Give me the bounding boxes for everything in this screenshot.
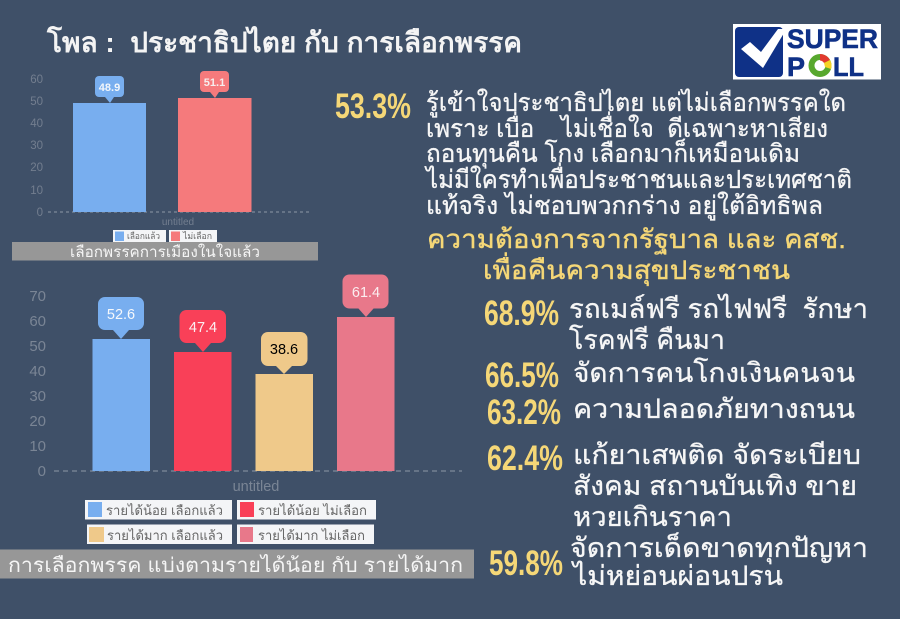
y axis labels: 10 (29, 438, 46, 455)
legend: large chart: รายได้มาก ไม่เลือก (258, 528, 365, 543)
y axis labels: 10 (30, 185, 43, 197)
logo: Super Poll: LL (833, 52, 864, 82)
bar: low income selected (92, 339, 150, 471)
title: โพล : ประชาธิปไตย กับ การเลือกพรรค (46, 25, 522, 58)
text block: reasons for not choosing a party: แท้จริง ไม่ชอบพวกกร่าง อยู่ใต้อิทธิพล (426, 191, 823, 221)
text block: reasons for not choosing a party: รู้เข้าใจประชาธิปไตย แต่ไม่เลือกพรรคใด (426, 88, 846, 118)
label bubble 48.9 (95, 76, 124, 103)
need: social order: แก้ยาเสพติด จัดระเบียบ (573, 440, 861, 470)
legend: small chart: ไม่เลือก (182, 231, 212, 241)
chart: small bar chart (30, 71, 310, 242)
need: free services: รถเมล์ฟรี รถไฟฟรี รักษา (569, 293, 868, 324)
stat: 63.2%: 63.2% (487, 393, 561, 432)
label bubble 48.9: 48.9 (99, 82, 120, 94)
legend: small chart (113, 230, 217, 242)
logo: Super Poll: SUPER (787, 24, 878, 54)
y axis labels: 70 (29, 288, 46, 305)
y axis labels (29, 288, 46, 480)
bar: not selected 51.1 (178, 98, 252, 212)
legend: large chart (85, 500, 376, 544)
text block: reasons for not choosing a party: ไม่มีใครทำเพื่อประชาชนและประเทศชาติ (424, 162, 852, 194)
y axis labels: 30 (30, 140, 43, 152)
legend: large chart: รายได้น้อย ไม่เลือก (258, 503, 367, 518)
y axis labels: 20 (29, 413, 46, 430)
y axis labels: 0 (38, 463, 46, 480)
chart: large bar chart: untitled (233, 479, 279, 495)
label bubble 38.6 (261, 332, 308, 374)
logo: Super Poll (733, 24, 881, 82)
need: corruption: จัดการคนโกงเงินคนจน (573, 358, 855, 388)
label bubble 61.4: 61.4 (352, 285, 380, 301)
label bubble 52.6: 52.6 (107, 307, 135, 323)
stat: 66.5%: 66.5% (485, 356, 559, 395)
label bubble 52.6 (98, 297, 144, 339)
caption: large chart (0, 550, 474, 578)
stat: 59.8%: 59.8% (489, 544, 563, 583)
bar: high income not selected (337, 317, 394, 471)
y axis labels: 20 (30, 162, 43, 174)
caption: large chart: การเลือกพรรค แบ่งตามรายได้น้อย กับ รายได้มาก (8, 554, 463, 577)
label bubble 61.4 (342, 274, 388, 317)
need: decisive action: ไม่หย่อนผ่อนปรน (571, 561, 783, 591)
stat: 62.4%: 62.4% (487, 439, 563, 478)
caption: small chart (12, 242, 318, 261)
need: decisive action: จัดการเด็ดขาดทุกปัญหา (570, 530, 868, 565)
label bubble 47.4: 47.4 (189, 320, 217, 336)
text block: reasons for not choosing a party (424, 88, 852, 221)
y axis labels: 60 (30, 74, 43, 86)
label bubble 51.1 (200, 71, 229, 98)
y axis labels: 30 (29, 388, 46, 405)
chart: small bar chart: untitled (162, 217, 194, 228)
y axis labels: 50 (29, 338, 46, 355)
chart: large bar chart (29, 274, 462, 544)
stat: 53.3%: 53.3% (335, 87, 411, 126)
bar: selected 48.9 (73, 103, 146, 212)
text block: reasons for not choosing a party: ถอนทุนคืน โกง เลือกมาก็เหมือนเดิม (426, 138, 800, 169)
legend: large chart: รายได้น้อย เลือกแล้ว (106, 503, 223, 518)
y axis labels: 40 (30, 118, 43, 130)
stat: 68.9%: 68.9% (484, 294, 559, 333)
label bubble 51.1: 51.1 (204, 77, 225, 89)
y axis labels (30, 74, 43, 219)
logo: Super Poll: P (787, 52, 805, 82)
bar: low income not selected (174, 352, 232, 471)
y axis labels: 40 (29, 363, 46, 380)
label bubble 38.6: 38.6 (270, 342, 298, 358)
text block: reasons for not choosing a party: เพราะ เบื่อ ไม่เชื่อใจ ดีเฉพาะหาเสียง (426, 111, 828, 143)
heading: needs from the government: เพื่อคืนความสุขประชาชน (483, 252, 790, 286)
need: road safety: ความปลอดภัยทางถนน (573, 394, 855, 424)
heading: needs from the government: ความต้องการจากรัฐบาล และ คสช. (427, 224, 846, 255)
need: free services (569, 293, 868, 355)
heading: needs from the government (427, 224, 846, 286)
need: free services: โรคฟรี คืนมา (569, 325, 725, 355)
label bubble 47.4 (180, 310, 226, 352)
legend: small chart: เลือกแล้ว (127, 231, 160, 241)
need: social order: สังคม สถานบันเทิง ขาย (573, 471, 857, 501)
y axis labels: 60 (29, 313, 46, 330)
caption: small chart: เลือกพรรคการเมืองในใจแล้ว (70, 243, 260, 261)
need: decisive action (570, 530, 868, 591)
need: social order: หวยเกินราคา (573, 502, 732, 532)
y axis labels: 0 (37, 207, 43, 219)
y axis labels: 50 (30, 96, 43, 108)
need: social order (573, 440, 861, 532)
bar: high income selected (256, 374, 313, 471)
legend: large chart: รายได้มาก เลือกแล้ว (107, 528, 223, 543)
